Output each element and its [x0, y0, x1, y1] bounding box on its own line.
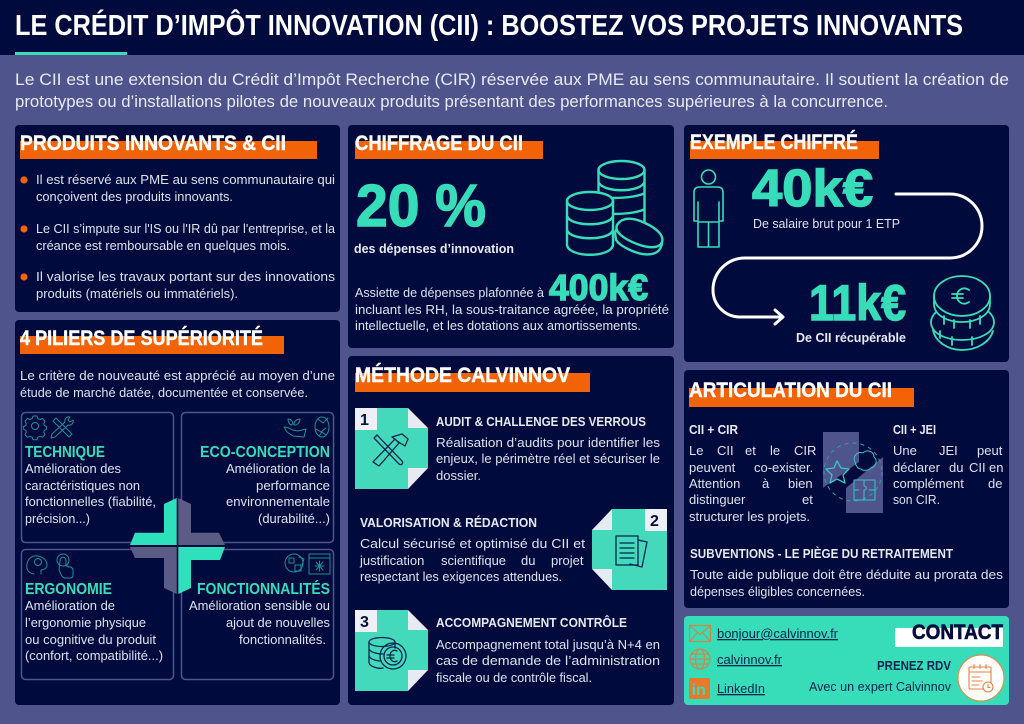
step 2 text: VALORISATION & RÉDACTION	[360, 515, 537, 530]
column: cii + jei: complément	[893, 476, 964, 491]
step 1 badge: 1	[360, 412, 369, 429]
step 2 badge: 2	[650, 513, 659, 530]
card: ergonomie: ERGONOMIE	[25, 581, 112, 598]
card: ergonomie: (confort, compatibilité...)	[25, 648, 163, 663]
column: cii + cir: et	[745, 443, 756, 458]
column: cii + jei: peut	[977, 443, 1003, 458]
column: cii + jei	[893, 422, 1003, 507]
heading: articulation: ARTICULATION DU CII	[689, 379, 892, 402]
card: fonctionnalites: FONCTIONNALITÉS	[197, 581, 330, 598]
link: website: calvinnov.fr	[717, 652, 783, 667]
card: fonctionnalites	[182, 550, 334, 680]
text: assiette: incluant les RH, la sous-traitance agréée, la propriété	[355, 302, 669, 317]
step 2 badge	[592, 509, 667, 590]
step 1 badge	[355, 408, 428, 489]
column: cii + cir: co-exister.	[754, 460, 813, 475]
panel: 4 piliers	[15, 320, 340, 705]
figure: 400k€: 400k€	[549, 267, 648, 308]
central cross	[130, 498, 225, 594]
column: cii + cir: peuvent	[689, 460, 736, 475]
card: eco-conception	[182, 412, 334, 542]
step 1 text: enjeux, le périmètre réel et sécuriser le	[436, 451, 660, 466]
step 3 text: Accompagnement total jusqu’à N+4 en	[436, 637, 660, 652]
icon: calendar button	[958, 655, 1004, 701]
figure: 11k€: 11k€	[809, 275, 906, 331]
step 2 text: justification	[359, 553, 424, 568]
column: cii + cir	[689, 422, 816, 524]
icon: functions cluster	[285, 554, 304, 572]
label: depenses: des dépenses d’innovation	[354, 241, 514, 256]
icon: head	[27, 556, 47, 574]
heading: contact	[895, 621, 1003, 647]
heading: methode: MÉTHODE CALVINNOV	[355, 364, 570, 387]
card: technique: TECHNIQUE	[25, 444, 105, 461]
column: cii + cir: Attention	[689, 476, 740, 491]
panel: chiffrage	[348, 125, 674, 348]
card: fonctionnalites: Amélioration sensible ou	[189, 598, 330, 613]
step 2 text	[359, 515, 585, 584]
card: eco-conception: environnementale	[226, 494, 330, 509]
step 3 text: ACCOMPAGNEMENT CONTRÔLE	[436, 615, 627, 630]
step 1 text: dossier.	[436, 468, 481, 483]
panel: produits innovants	[15, 125, 340, 312]
column: cii + cir: et	[802, 492, 813, 507]
column: cii + cir: CII + CIR	[689, 422, 739, 437]
card: technique	[22, 412, 174, 542]
icon: plant in hand	[284, 419, 306, 437]
column: cii + cir: Le	[689, 443, 703, 458]
intro text: Le CII est une extension du Crédit d’Impôt Recherche (CIR) réservée aux PME au sens communautaire. Il soutient la création de	[15, 71, 1009, 89]
icon: euro coins	[369, 638, 406, 669]
label: recuperable: De CII récupérable	[796, 330, 906, 345]
column: cii + jei: CII	[969, 460, 986, 475]
bullet list	[20, 172, 336, 301]
column: cii + cir: CII	[717, 443, 734, 458]
icon: hammer and screwdriver	[373, 434, 408, 466]
card: eco-conception: performance	[256, 478, 330, 493]
figure: 40k€: 40k€	[752, 160, 873, 218]
column: cii + jei: en	[989, 460, 1003, 475]
piliers intro	[20, 368, 335, 400]
link: email: bonjour@calvinnov.fr	[717, 626, 839, 641]
bullet list: conçoivent des produits innovants.	[36, 189, 233, 204]
heading: 4 piliers: 4 PILIERS DE SUPÉRIORITÉ	[20, 327, 263, 350]
subventions	[690, 546, 1004, 599]
step 3 badge	[355, 610, 428, 691]
icon: coin stacks	[567, 161, 662, 255]
label: salaire: De salaire brut pour 1 ETP	[753, 216, 900, 231]
card: eco-conception: ECO-CONCEPTION	[200, 444, 330, 461]
bullet list: Il est réservé aux PME au sens communautaire qui	[36, 172, 335, 187]
step 2 text: projet	[551, 553, 584, 568]
card: technique: caractéristiques non	[25, 478, 140, 493]
bullet list: Le CII s’impute sur l'IS ou l'IR dû par l'entreprise, et la	[36, 221, 336, 236]
icon: euro coin stack	[931, 276, 994, 350]
step 2 text: du	[521, 553, 535, 568]
step 1 text: Réalisation d’audits pour identifier les	[436, 435, 661, 450]
header band	[0, 0, 1024, 55]
step 1 text: AUDIT & CHALLENGE DES VERROUS	[436, 414, 646, 429]
text: assiette: Assiette de dépenses plafonnée à	[355, 285, 545, 300]
card: ergonomie: l’ergonomie physique	[25, 615, 146, 630]
panel: articulation	[684, 370, 1009, 608]
intro text: prototypes ou d’installations pilotes de nouveaux produits présentant des performances supérieures à la concurrence.	[15, 93, 888, 111]
step 3 text: cas de demande de l’administration	[436, 653, 660, 668]
bullet list: produits (matériels ou immatériels).	[36, 286, 238, 301]
column: cii + jei: Une	[893, 443, 917, 458]
card: technique: précision...)	[25, 511, 90, 526]
heading: chiffrage: CHIFFRAGE DU CII	[355, 132, 523, 155]
icon: globe	[690, 649, 710, 669]
column: cii + cir: distinguer	[689, 492, 746, 507]
piliers intro: étude de marché datée, documentée et conservée.	[20, 385, 308, 400]
step 2 text: Calcul sécurisé et optimisé du CII et	[360, 536, 585, 551]
panel: exemple chiffre	[684, 125, 1009, 362]
heading: contact: CONTACT	[912, 621, 1003, 644]
illustration: puzzle and ideas	[823, 432, 883, 513]
text: avec un expert: Avec un expert Calvinnov	[809, 679, 951, 694]
card: ergonomie	[22, 550, 174, 680]
subventions: Toute aide publique doit être déduite au prorata des	[690, 567, 1004, 582]
icon: recycle globe	[315, 417, 329, 437]
step 1 text	[436, 414, 661, 483]
column: cii + cir: structurer les projets.	[689, 509, 810, 524]
piliers intro: Le critère de nouveauté est apprécié au moyen d’une	[20, 368, 335, 383]
icon: person	[694, 170, 723, 247]
icon: browser window	[309, 554, 330, 574]
card: fonctionnalites: fonctionnalités.	[239, 632, 326, 647]
arrow: flow	[713, 194, 982, 324]
icon: linkedin	[689, 678, 710, 699]
card: technique: fonctionnelles (fiabilité,	[25, 494, 156, 509]
card: fonctionnalites: ajout de nouvelles	[226, 615, 330, 630]
column: cii + cir: le	[770, 443, 780, 458]
card: eco-conception: (durabilité...)	[258, 511, 330, 526]
step 2 text: scientifique	[441, 553, 506, 568]
panel: contact	[684, 616, 1009, 705]
step 3 text	[436, 615, 660, 685]
icon: documents	[616, 536, 647, 567]
figure: 20 %: 20 %	[356, 173, 486, 239]
subventions: dépenses éligibles concernées.	[690, 584, 865, 599]
card: eco-conception: Amélioration de la	[226, 461, 331, 476]
column: cii + jei: son CIR.	[893, 492, 940, 507]
link: linkedin: LinkedIn	[717, 681, 765, 696]
panel: methode	[348, 356, 674, 705]
text: assiette: intellectuelle, et les dotations aux amortissements.	[355, 318, 641, 333]
card: technique: Amélioration des	[25, 461, 121, 476]
column: cii + jei: JEI	[939, 443, 958, 458]
icon: linkedin: in	[692, 682, 706, 699]
intro text	[15, 71, 1009, 111]
bullet list: Il valorise les travaux portant sur des innovations	[36, 269, 336, 284]
heading: produits innovants: PRODUITS INNOVANTS & CII	[20, 132, 286, 155]
icon: gear	[24, 416, 46, 440]
card: ergonomie: Amélioration de	[25, 598, 115, 613]
column: cii + jei: CII + JEI	[893, 422, 936, 437]
column: cii + cir: à	[762, 476, 770, 491]
column: cii + cir: CIR	[794, 443, 816, 458]
step 3 badge: 3	[360, 614, 369, 631]
step 2 text: respectant les exigences attendues.	[360, 569, 562, 584]
heading: exemple: EXEMPLE CHIFFRÉ	[690, 131, 858, 154]
column: cii + jei: du	[949, 460, 963, 475]
column: cii + jei: déclarer	[893, 460, 941, 475]
step 3 text: fiscale ou de contrôle fiscal.	[436, 670, 592, 685]
icon: touch hand	[57, 554, 73, 578]
card: ergonomie: ou cognitive du produit	[25, 632, 156, 647]
bullet list: créance est remboursable en quelques mois.	[36, 238, 290, 253]
column: cii + jei: de	[988, 476, 1002, 491]
text: assiette	[355, 285, 669, 333]
icon: tools	[51, 417, 73, 438]
subventions: SUBVENTIONS - LE PIÈGE DU RETRAITEMENT	[690, 546, 953, 561]
column: cii + cir: bien	[788, 476, 813, 491]
icon: envelope	[690, 626, 710, 642]
text: prenez rdv: PRENEZ RDV	[877, 658, 951, 673]
